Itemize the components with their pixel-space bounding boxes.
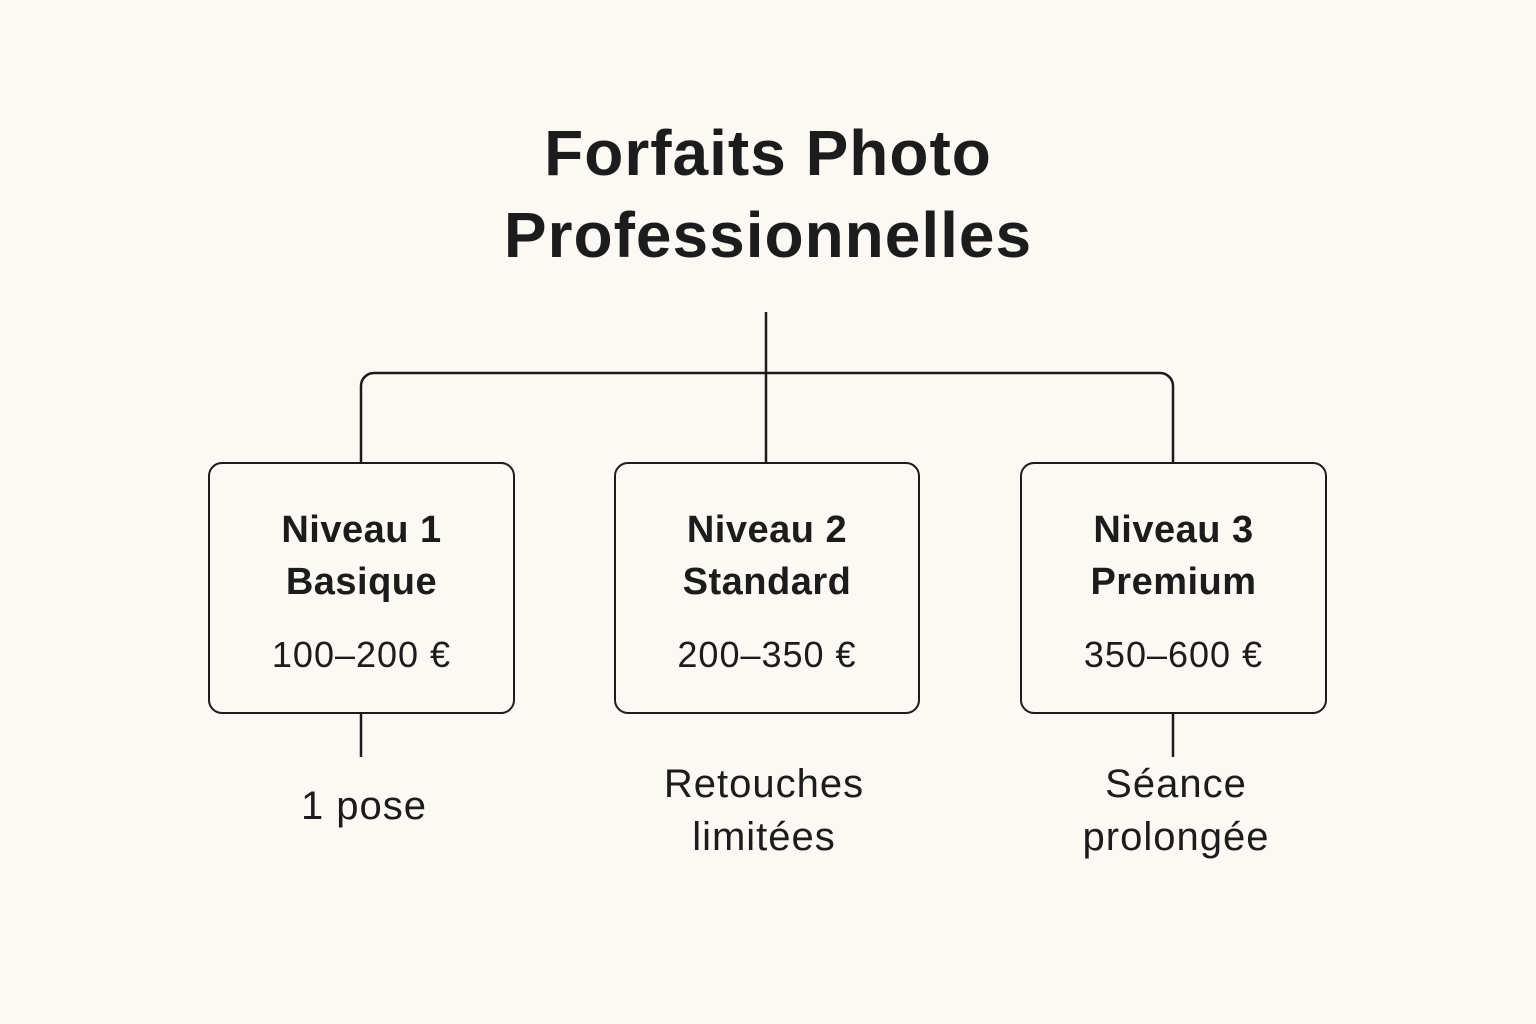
title: Forfaits Photo [544, 117, 992, 189]
label: 1 pose: 1 pose [301, 784, 427, 828]
label: seance [1083, 762, 1269, 859]
label: retouches: limitées [692, 815, 836, 859]
title: Professionnelles [504, 199, 1032, 271]
label: seance: Séance [1105, 762, 1247, 806]
panel: niveau 3: 350–600 € [1084, 634, 1263, 675]
label: retouches [664, 762, 864, 859]
label: retouches: Retouches [664, 762, 864, 806]
panel: niveau 3 [1020, 462, 1327, 714]
panel: niveau 3: Niveau 3 [1093, 509, 1254, 551]
panel: niveau 2: 200–350 € [677, 634, 857, 675]
panel: niveau 2: Niveau 2 [687, 509, 847, 551]
panel: niveau 2: Standard [683, 561, 851, 603]
panel: niveau 2 [614, 462, 920, 714]
title [504, 117, 1032, 271]
panel: niveau 3: Premium [1090, 561, 1257, 603]
panel: niveau 1: Niveau 1 [281, 509, 442, 551]
panel: niveau 1: Basique [286, 561, 437, 603]
label: seance: prolongée [1083, 815, 1269, 859]
panel: niveau 1: 100–200 € [272, 634, 451, 675]
panel: niveau 1 [208, 462, 515, 714]
